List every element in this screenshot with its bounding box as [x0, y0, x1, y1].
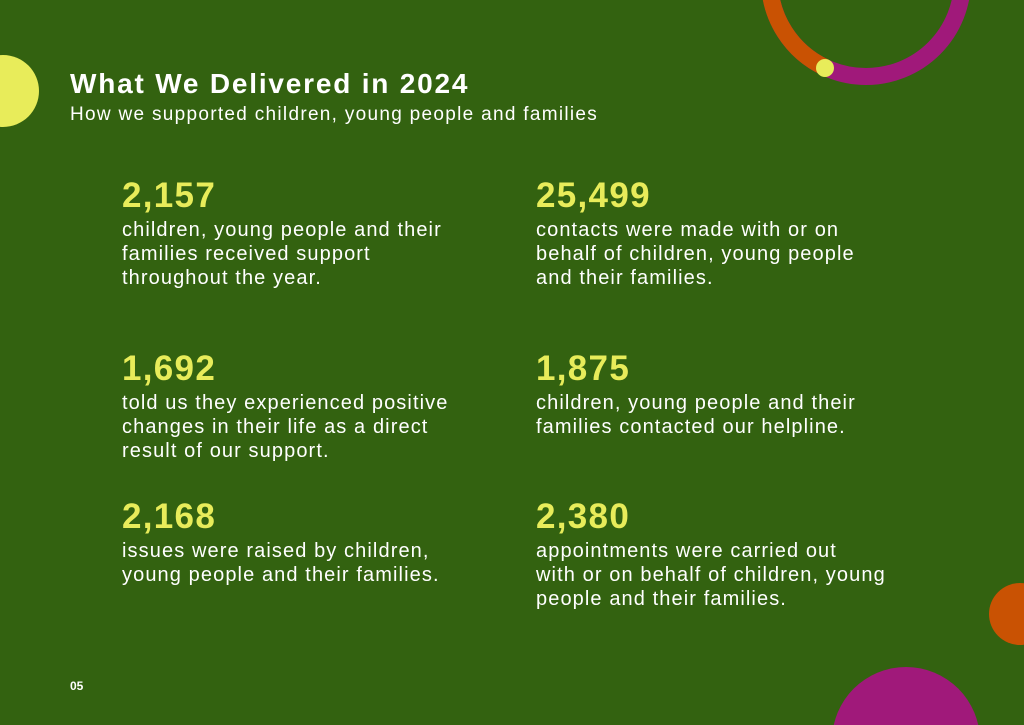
stat: 25,499: and their families.	[536, 267, 714, 289]
circle bottom magenta	[832, 667, 980, 725]
stat: 1,692: told us they experienced positive	[122, 392, 448, 414]
stat: 1,692: 1,692	[122, 349, 216, 388]
stat: 2,380: people and their families.	[536, 588, 787, 610]
subtitle: How we supported children, young people and families	[70, 104, 598, 125]
stat: 2,168: 2,168	[122, 497, 216, 536]
stat: 2,157: families received support	[122, 243, 371, 265]
circle right orange	[989, 583, 1024, 645]
stat: 2,168	[122, 497, 440, 586]
stat: 2,380: with or on behalf of children, young	[536, 564, 886, 586]
page number: 05	[70, 679, 83, 693]
ring top right	[770, 0, 962, 77]
stat: 2,380	[536, 497, 886, 610]
stat: 25,499: contacts were made with or on	[536, 219, 839, 241]
stat: 2,157	[122, 176, 442, 289]
stat: 2,168: young people and their families.	[122, 564, 440, 586]
circle left yellow	[0, 55, 39, 127]
stat: 2,157: children, young people and their	[122, 219, 442, 241]
stat: 1,875: families contacted our helpline.	[536, 416, 846, 438]
stat: 2,168: issues were raised by children,	[122, 540, 430, 562]
stat: 25,499: behalf of children, young people	[536, 243, 855, 265]
stat: 1,692: result of our support.	[122, 440, 330, 462]
stat: 1,875: 1,875	[536, 349, 630, 388]
stat: 2,157: 2,157	[122, 176, 216, 215]
stat: 1,692: changes in their life as a direct	[122, 416, 428, 438]
stat: 2,157: throughout the year.	[122, 267, 322, 289]
stat: 1,875	[536, 349, 856, 438]
stat: 25,499	[536, 176, 855, 289]
stat: 2,380: 2,380	[536, 497, 630, 536]
stat: 25,499: 25,499	[536, 176, 651, 215]
title: What We Delivered in 2024	[70, 68, 469, 99]
stat: 1,875: children, young people and their	[536, 392, 856, 414]
stat: 2,380: appointments were carried out	[536, 540, 837, 562]
stat: 1,692	[122, 349, 448, 462]
